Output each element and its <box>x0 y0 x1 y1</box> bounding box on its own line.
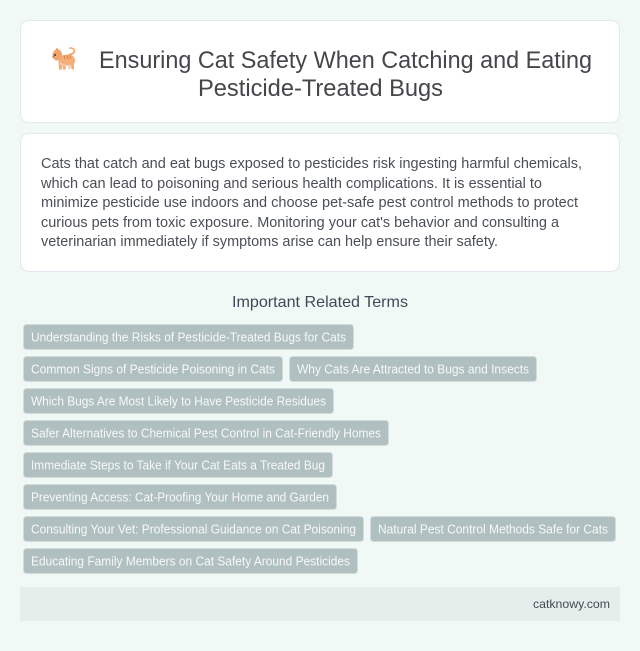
heading: important related terms: Important Related Terms <box>232 294 408 311</box>
panel: intro paragraph card <box>20 134 620 272</box>
chip: which bugs: Which Bugs Are Most Likely to Have Pesticide Residues <box>31 394 326 408</box>
chip: immediate steps <box>24 452 332 478</box>
intro paragraph text: Cats that catch and eat bugs exposed to pesticides risk ingesting harmful chemicals, <box>41 155 582 172</box>
chip: consulting your vet: Consulting Your Vet: Professional Guidance on Cat Poisoning <box>31 522 356 536</box>
title <box>99 47 592 102</box>
title: Pesticide-Treated Bugs <box>198 75 443 102</box>
panel: title card <box>20 20 620 122</box>
intro paragraph text: veterinarian immediately if symptoms arise can help ensure their safety. <box>41 233 498 250</box>
footer source text: catknowy.com <box>533 597 610 611</box>
chip: why cats are attracted: Why Cats Are Attracted to Bugs and Insects <box>297 362 529 376</box>
chip: common signs: Common Signs of Pesticide Poisoning in Cats <box>31 362 275 376</box>
chip: consulting your vet <box>24 516 364 542</box>
chip: educating family members <box>24 548 358 574</box>
title: Ensuring Cat Safety When Catching and Eating <box>99 47 592 74</box>
footer bar <box>20 587 620 621</box>
chip: common signs <box>24 356 282 382</box>
chip: preventing access <box>24 484 336 510</box>
icon: orange cat <box>52 47 75 70</box>
panel: related term chips <box>24 324 616 574</box>
chip: natural pest control: Natural Pest Control Methods Safe for Cats <box>378 522 608 536</box>
intro paragraph text: minimize pesticide use indoors and choose pet-safe pest control methods to protect <box>41 194 579 211</box>
chip: immediate steps: Immediate Steps to Take if Your Cat Eats a Treated Bug <box>31 458 325 472</box>
chip: understanding the risks: Understanding the Risks of Pesticide-Treated Bugs for Cats <box>31 330 346 344</box>
chip: which bugs <box>24 388 334 414</box>
intro paragraph text: curious pets from toxic exposure. Monitoring your cat's behavior and consulting a <box>41 214 560 231</box>
chip: educating family members: Educating Family Members on Cat Safety Around Pesticides <box>31 554 350 568</box>
chip: safer alternatives: Safer Alternatives to Chemical Pest Control in Cat-Friendly Homes <box>31 426 381 440</box>
intro paragraph text <box>40 155 582 250</box>
intro paragraph text: which can lead to poisoning and serious health complications. It is essential to <box>40 175 542 192</box>
chip: why cats are attracted <box>290 356 536 382</box>
chip: understanding the risks <box>24 324 354 350</box>
chip: natural pest control <box>370 516 616 542</box>
chip: safer alternatives <box>24 420 388 446</box>
chip: preventing access: Preventing Access: Cat-Proofing Your Home and Garden <box>31 490 329 504</box>
